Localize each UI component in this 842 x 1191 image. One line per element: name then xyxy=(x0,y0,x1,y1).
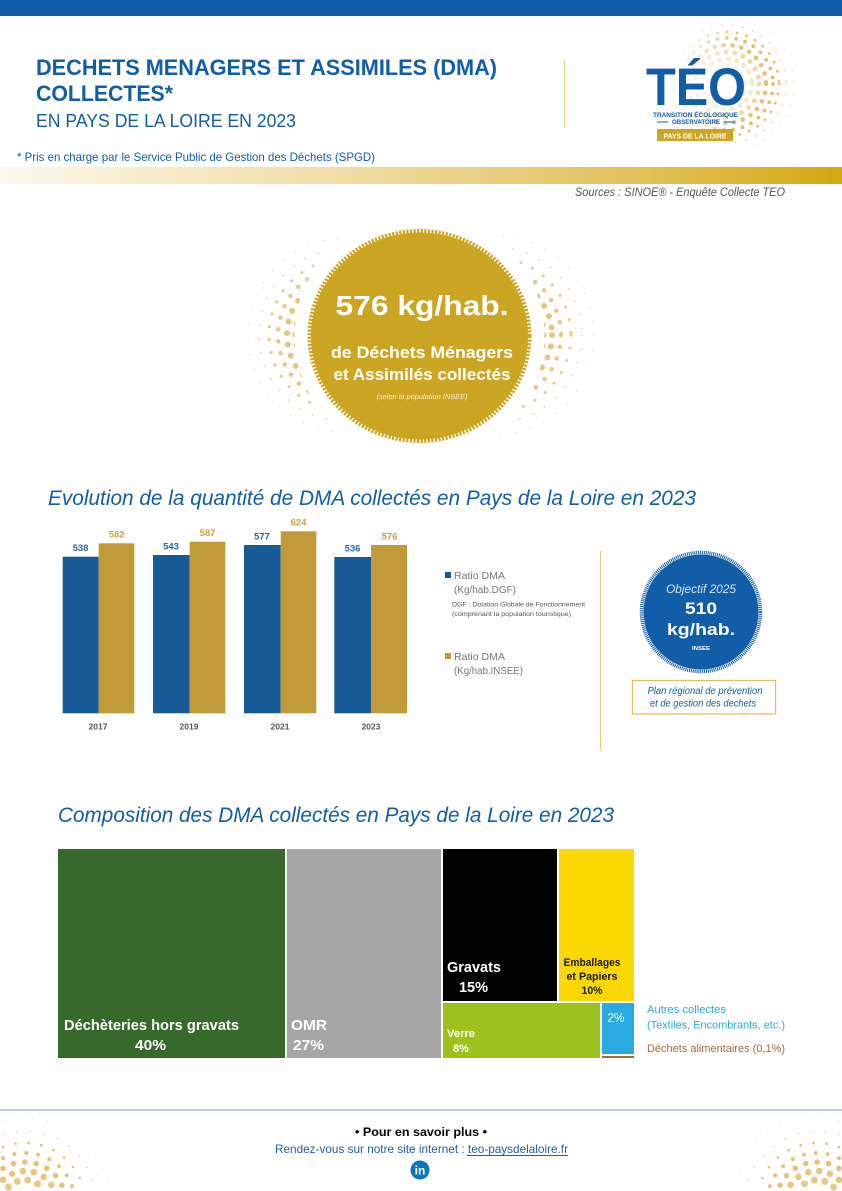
bars 2021: 2021 xyxy=(271,722,290,732)
tile: emballages xyxy=(559,849,634,1001)
bars 2021: 624 xyxy=(291,518,307,528)
logo: TEO: TÉO xyxy=(646,57,746,117)
gradient band xyxy=(0,167,842,184)
objective badge xyxy=(642,552,760,672)
key figure badge: de Déchets Ménagers xyxy=(331,343,513,362)
title xyxy=(36,55,497,131)
plan callout: Plan régional de prévention xyxy=(648,686,763,697)
footer text: Rendez-vous sur notre site internet : teo-paysdelaloire.fr xyxy=(275,1142,568,1156)
icon: linkedin: in xyxy=(415,1164,425,1178)
chart legend: (Kg/hab.DGF) xyxy=(454,584,516,596)
footnote: * Pris en charge par le Service Public de Gestion des Déchets (SPGD) xyxy=(17,150,375,164)
bar chart xyxy=(63,518,407,732)
tile: dechèteries: 40% xyxy=(135,1037,166,1054)
bars 2023 xyxy=(334,532,407,732)
top banner xyxy=(0,0,842,16)
tile: emballages: et Papiers xyxy=(566,971,618,983)
footer dots right xyxy=(734,1118,839,1187)
chart legend xyxy=(445,570,585,677)
treemap xyxy=(58,849,634,1058)
tile: OMR: 27% xyxy=(293,1037,324,1054)
tile: alimentaires xyxy=(602,1056,634,1058)
tile: OMR: OMR xyxy=(291,1017,327,1034)
tile: gravats: Gravats xyxy=(447,959,501,976)
tile: gravats xyxy=(443,849,557,1001)
title: EN PAYS DE LA LOIRE EN 2023 xyxy=(36,111,296,131)
treemap side labels xyxy=(647,1004,785,1055)
tile: autres: 2% xyxy=(608,1010,625,1025)
objective badge: kg/hab. xyxy=(667,620,735,639)
treemap side labels: Déchets alimentaires (0,1%) xyxy=(647,1043,785,1055)
bars 2017 xyxy=(63,530,134,732)
bars 2019: 587 xyxy=(200,528,215,539)
heading: composition: Composition des DMA collectés en Pays de la Loire en 2023 xyxy=(58,803,614,827)
footer text xyxy=(275,1127,568,1156)
bars 2017: 2017 xyxy=(89,722,108,732)
key figure badge: et Assimilés collectés xyxy=(334,365,510,384)
chart legend: Ratio DMA xyxy=(454,570,505,582)
tile: emballages: Emballages xyxy=(564,957,620,969)
bars 2021: 577 xyxy=(254,532,270,542)
bars 2017: 582 xyxy=(109,530,124,540)
footer text: • Pour en savoir plus • xyxy=(355,1127,487,1139)
tile: emballages: 10% xyxy=(582,985,603,997)
logo: TEO: OBSERVATOIRE xyxy=(672,119,720,126)
logo: TEO: PAYS DE LA LOIRE xyxy=(664,132,726,140)
objective badge: 510 xyxy=(685,599,717,618)
title: DECHETS MENAGERS ET ASSIMILES (DMA) xyxy=(36,55,497,80)
chart legend: DGF : Dotation Globale de Fonctionnement xyxy=(452,602,585,608)
heading: evolution: Evolution de la quantité de DMA collectés en Pays de la Loire en 2023 xyxy=(48,486,696,510)
treemap side labels: Autres collectes xyxy=(647,1004,726,1016)
icon: linkedin xyxy=(410,1160,430,1180)
key figure badge xyxy=(248,214,594,458)
treemap side labels: (Textiles, Encombrants, etc.) xyxy=(647,1020,785,1032)
chart legend: (Kg/hab.INSEE) xyxy=(454,665,523,677)
tile: dechèteries xyxy=(58,849,285,1058)
tile: verre xyxy=(443,1003,600,1058)
objective badge: INSEE xyxy=(692,646,711,652)
bars 2019 xyxy=(153,528,225,732)
footer line xyxy=(0,1109,842,1111)
bars 2017: 538 xyxy=(73,543,88,554)
key figure badge: (selon la population INSEE) xyxy=(376,394,468,401)
bars 2023: 2023 xyxy=(362,722,381,732)
objective badge: Objectif 2025 xyxy=(666,582,736,596)
tile: autres xyxy=(602,1003,634,1054)
footer dots left xyxy=(3,1118,108,1187)
tile: gravats: 15% xyxy=(459,979,488,996)
bars 2023: 536 xyxy=(345,544,360,554)
tile: OMR xyxy=(287,849,441,1058)
bars 2019: 2019 xyxy=(180,722,199,732)
bars 2019: 543 xyxy=(163,542,179,552)
logo: TEO xyxy=(646,17,794,151)
header divider xyxy=(564,60,565,127)
logo: TEO: TRANSITION ÉCOLOGIQUE xyxy=(653,110,738,119)
chart divider xyxy=(600,551,601,750)
tile: verre: 8% xyxy=(453,1043,469,1055)
sources: Sources : SINOE® - Enquête Collecte TEO xyxy=(575,185,785,199)
tile: dechèteries: Déchèteries hors gravats xyxy=(64,1017,239,1034)
key figure badge: 576 kg/hab. xyxy=(336,290,508,321)
bars 2023: 576 xyxy=(382,532,397,542)
plan callout xyxy=(632,680,776,714)
chart legend: Ratio DMA xyxy=(454,651,505,663)
title: COLLECTES* xyxy=(36,81,173,106)
plan callout: et de gestion des dechets xyxy=(650,698,756,710)
bars 2021 xyxy=(244,518,316,732)
chart legend: (comprenant la population touristique) xyxy=(452,611,571,618)
tile: verre: Verre xyxy=(447,1028,475,1040)
